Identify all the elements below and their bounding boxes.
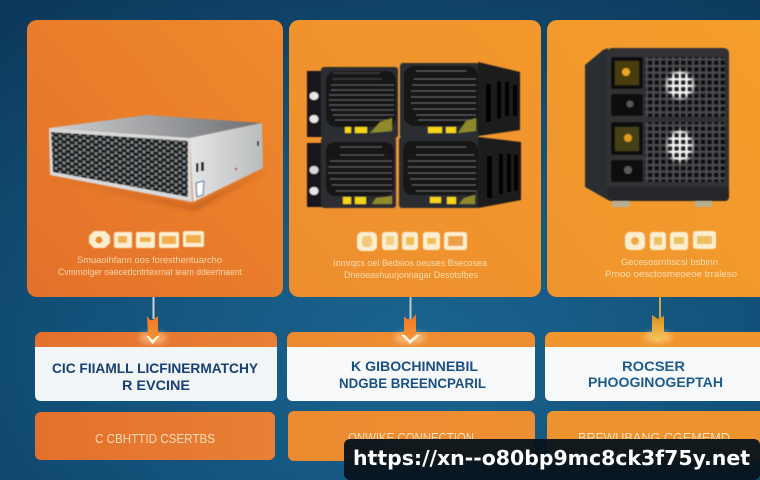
feature icons: [357, 232, 467, 251]
icon: stacked power units: [307, 62, 521, 208]
box text: BRFWUBANG CGEMEMD: [578, 431, 730, 445]
card title: R EVCINE: [122, 378, 190, 393]
card title: [339, 359, 486, 391]
panel background: [289, 20, 541, 297]
bottom box: left: [35, 412, 275, 460]
panel background: [27, 20, 283, 297]
unit bottom left: [321, 137, 396, 208]
box background: [288, 411, 535, 461]
arrow: left: [139, 297, 167, 344]
banner background: [344, 439, 760, 480]
description text: Iomrqcs oel Bedsios oeuses Bsecosea: [333, 258, 487, 268]
box background: [35, 412, 275, 460]
description text: Prnoo oesctosmeoeoe trraleso: [605, 269, 737, 279]
card header: [35, 332, 277, 362]
card title: K GIBOCHINNEBIL: [351, 359, 478, 374]
panel background: [547, 20, 760, 297]
panel: left server: [27, 20, 283, 297]
switch bottom: [611, 160, 643, 182]
description text: [58, 255, 242, 277]
card title: NDGBE BREENCPARIL: [339, 376, 486, 391]
description text: Cvmmolger oaecedcntrtexrnat ieam ddeertnaent: [58, 267, 242, 277]
side bottom: [478, 137, 521, 208]
arrow: center: [394, 297, 426, 344]
display bottom: [611, 122, 643, 155]
description text: Smuaoihfann oos foresthentuarcho: [77, 255, 222, 265]
icon: dual fan unit: [585, 48, 729, 207]
description text: Dneoeashuurjonnagar Desotsfbes: [344, 270, 478, 280]
url banner: [344, 439, 760, 480]
feature icons: [625, 231, 716, 250]
description text: Gecesosrnhscsi bsbinn: [621, 257, 718, 267]
feet: [612, 201, 712, 207]
fan grille top: [645, 57, 725, 117]
rack ears: [307, 71, 322, 207]
description text: [333, 258, 487, 280]
card title: [52, 361, 258, 393]
card header: [287, 332, 535, 362]
feature icons: [89, 231, 204, 248]
card title: PHOOGINOGEPTAH: [588, 375, 723, 390]
arrow: right: [644, 297, 672, 343]
card title: CIC FIIAMLL LICFINERMATCHY: [52, 361, 258, 376]
fan grille bottom: [645, 122, 725, 182]
description text: [605, 257, 737, 279]
label card: right: [545, 332, 760, 401]
card body: [545, 347, 760, 401]
card body: [287, 347, 535, 401]
display top: [611, 57, 643, 89]
icon: rack server: [49, 115, 265, 210]
bottom box: right: [547, 411, 760, 461]
card header: [545, 332, 760, 362]
box background: [547, 411, 760, 461]
panel: right server: [547, 20, 760, 297]
box text: ONWIKE CONNECTION: [348, 431, 474, 445]
card title: [588, 359, 723, 390]
unit bottom right: [399, 137, 479, 208]
label card: center: [287, 332, 535, 401]
label card: left: [35, 332, 277, 401]
panel: center server: [289, 20, 541, 297]
bottom box: center: [288, 411, 535, 461]
side top: [478, 62, 520, 136]
card body: [35, 347, 277, 401]
box text: C CBHTTID CSERTBS: [95, 432, 215, 446]
unit top right: [400, 63, 479, 138]
card title: ROCSER: [622, 359, 685, 374]
switch top: [611, 94, 643, 116]
unit top left: [321, 67, 398, 138]
banner text: https://xn--o80bp9mc8ck3f75y.net: [353, 446, 750, 470]
